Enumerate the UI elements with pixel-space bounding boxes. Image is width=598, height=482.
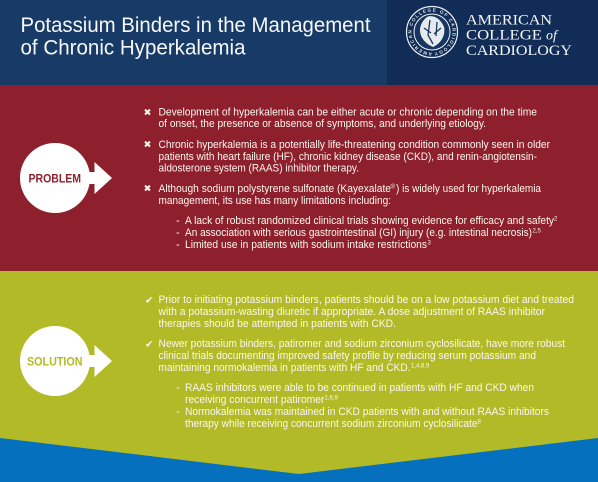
solution bullet 1: therapies should be attempted in patients with CKD. bbox=[158, 318, 396, 330]
solution bullet 1 bbox=[145, 294, 574, 330]
panel: solution bbox=[0, 271, 598, 482]
header band bbox=[0, 0, 598, 85]
problem sub-bullets bbox=[176, 215, 558, 251]
problem bullet 3: ✖ bbox=[144, 184, 152, 194]
problem bullet 2: Chronic hyperkalemia is a potentially life-threatening condition commonly seen in older bbox=[158, 139, 550, 151]
icon: problem circle arrow bbox=[20, 143, 112, 213]
panel: problem bbox=[0, 85, 598, 271]
solution sub-bullets: - bbox=[176, 382, 180, 394]
solution label: SOLUTION bbox=[27, 356, 82, 368]
icon: solution circle arrow bbox=[20, 326, 112, 396]
solution sub-bullets: 8 bbox=[478, 420, 482, 426]
solution sub-bullets: Normokalemia was maintained in CKD patients with and without RAAS inhibitors bbox=[185, 406, 549, 418]
problem sub-bullets: - bbox=[176, 227, 180, 239]
problem bullet 2: aldosterone system (RAAS) inhibitor therapy. bbox=[158, 162, 359, 174]
problem sub-bullets: A lack of robust randomized clinical trials showing evidence for efficacy and safety bbox=[185, 215, 554, 227]
solution bullet 2: Newer potassium binders, patiromer and sodium zirconium cyclosilicate, have more robust bbox=[158, 338, 565, 350]
problem sub-bullets: - bbox=[176, 239, 180, 251]
problem bullet 3 bbox=[144, 183, 542, 207]
problem bullet 1: Development of hyperkalemia can be either acute or chronic depending on the time bbox=[158, 106, 537, 118]
solution sub-bullets: RAAS inhibitors were able to be continued in patients with HF and CKD when bbox=[185, 382, 534, 394]
problem bullet 3: ® bbox=[390, 184, 396, 190]
title: of Chronic Hyperkalemia bbox=[20, 36, 246, 60]
problem sub-bullets: 2,5 bbox=[532, 228, 542, 234]
problem bullet 1: of onset, the presence or absence of symptoms, and underlying etiology. bbox=[158, 118, 486, 130]
problem bullet 3: Although sodium polystyrene sulfonate (Kayexalate bbox=[158, 183, 391, 195]
logo wordmark bbox=[466, 12, 572, 59]
logo wordmark: AMERICAN bbox=[466, 12, 552, 28]
problem sub-bullets: - bbox=[176, 215, 180, 227]
problem bullet 3: ) is widely used for hyperkalemia bbox=[396, 183, 542, 195]
logo wordmark: COLLEGE bbox=[466, 28, 542, 44]
solution bullet 2: maintaining normokalemia in patients with HF and CKD. bbox=[158, 362, 410, 374]
solution bullet 1: with a potassium-wasting diuretic if appropriate. A dose adjustment of RAAS inhibitor bbox=[158, 306, 545, 318]
problem label: PROBLEM bbox=[28, 174, 81, 186]
icon: college seal: AMERICAN COLLEGE OF CARDIOLOGY bbox=[408, 8, 456, 56]
problem bullet 1 bbox=[144, 106, 537, 130]
solution bullet 2: ✔ bbox=[145, 340, 153, 350]
solution bullet 1: Prior to initiating potassium binders, patients should be on a low potassium diet and treated bbox=[158, 294, 574, 306]
logo: American College of Cardiology bbox=[406, 6, 572, 59]
problem bullet 1: ✖ bbox=[144, 108, 152, 118]
title: Potassium Binders in the Management bbox=[20, 13, 371, 37]
problem sub-bullets: Limited use in patients with sodium intake restrictions bbox=[185, 239, 427, 251]
solution sub-bullets: therapy while receiving concurrent sodium zirconium cyclosilicate bbox=[185, 418, 478, 430]
solution sub-bullets: receiving concurrent patiromer bbox=[185, 394, 325, 406]
logo wordmark: of bbox=[546, 28, 559, 44]
solution bullet 2 bbox=[145, 338, 565, 374]
problem bullet 2 bbox=[144, 139, 550, 174]
solution bullet 2: clinical trials documenting improved safety profile by reducing serum potassium and bbox=[158, 350, 536, 362]
problem bullet 2: patients with heart failure (HF), chronic kidney disease (CKD), and renin-angiotensin- bbox=[158, 151, 537, 163]
problem sub-bullets: An association with serious gastrointestinal (GI) injury (e.g. intestinal necrosis) bbox=[185, 227, 532, 239]
solution bullet 2: 1,4,8,9 bbox=[411, 364, 430, 370]
blue footer chevron bbox=[0, 438, 598, 482]
solution sub-bullets: 1,6,9 bbox=[324, 396, 339, 402]
title bbox=[20, 13, 371, 60]
problem sub-bullets: 2 bbox=[554, 216, 558, 222]
problem bullet 2: ✖ bbox=[144, 140, 152, 150]
solution sub-bullets: - bbox=[176, 406, 180, 418]
logo wordmark: CARDIOLOGY bbox=[466, 43, 572, 59]
solution sub-bullets bbox=[176, 382, 549, 430]
problem sub-bullets: 3 bbox=[428, 240, 432, 246]
problem bullet 3: management, its use has many limitations including: bbox=[158, 195, 391, 207]
solution bullet 1: ✔ bbox=[145, 296, 153, 306]
